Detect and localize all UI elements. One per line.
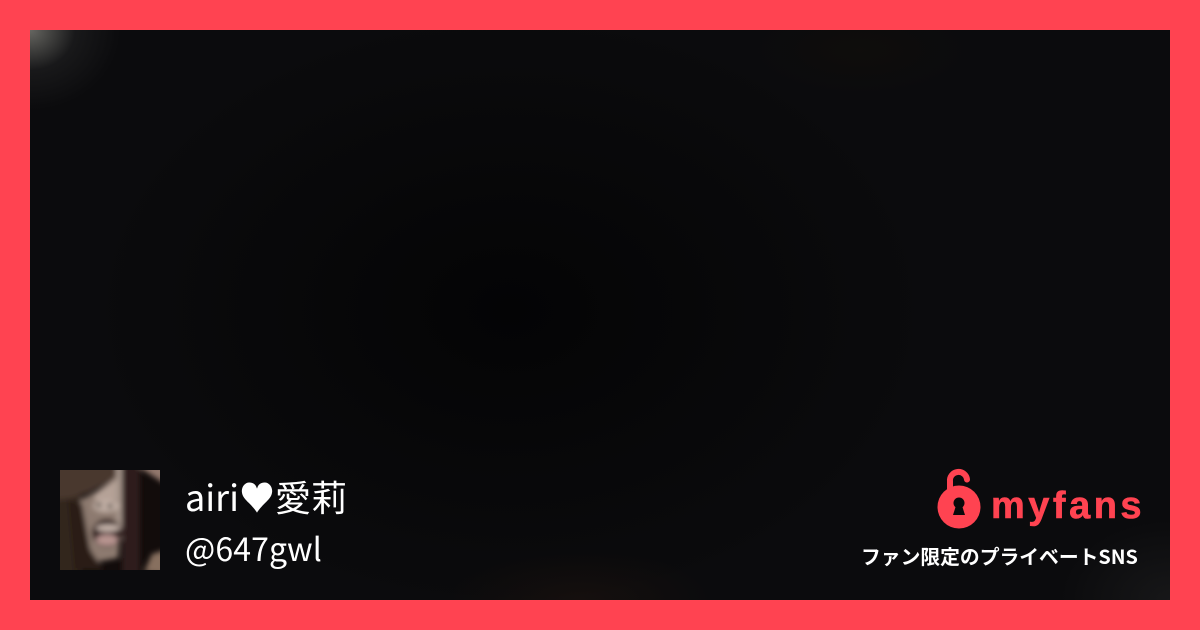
icon: creator avatar (60, 470, 160, 570)
text: myfans wordmark: myfans (991, 485, 1145, 527)
logo: myfans (938, 468, 1145, 528)
icon: open padlock (938, 468, 980, 528)
text: tagline: ファン限定のプライベートSNS (861, 541, 1138, 570)
text: creator handle: @647gwl (185, 525, 322, 571)
heading: creator name: airi♥愛莉 (185, 470, 347, 522)
